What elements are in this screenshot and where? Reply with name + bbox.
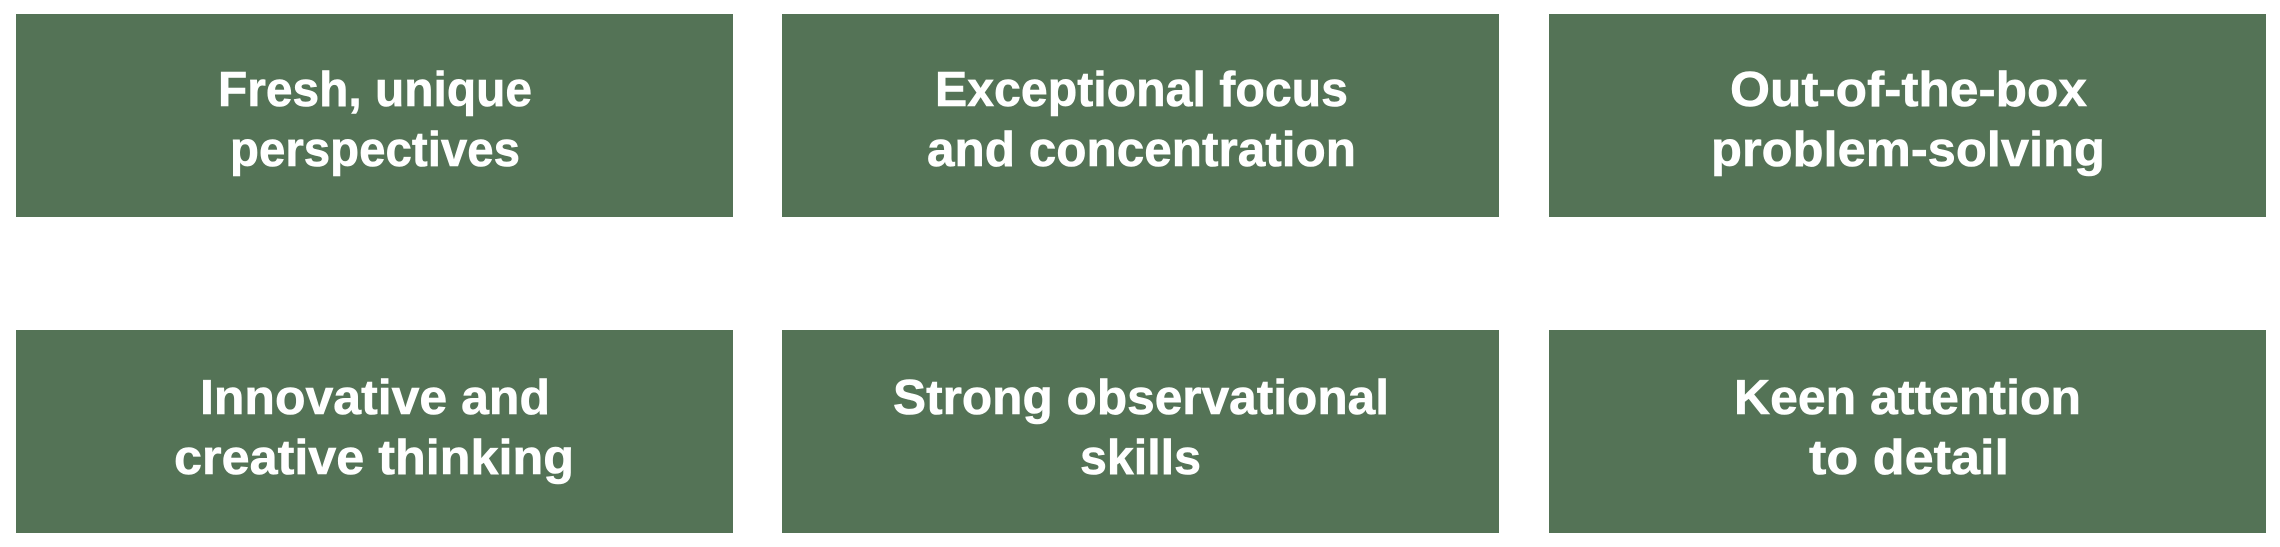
panel: out-of-the-box problem-solving [1549, 14, 2266, 217]
panel: keen attention to detail [1549, 330, 2266, 533]
panel: strong observational skills [782, 330, 1499, 533]
panel: out-of-the-box problem-solving: problem-solving [1711, 123, 2105, 177]
panel: keen attention to detail: Keen attention [1734, 371, 2081, 425]
panel: innovative and creative thinking [16, 330, 733, 533]
panel: fresh, unique perspectives: perspectives [230, 123, 520, 177]
panel: fresh, unique perspectives [16, 14, 733, 217]
panel: strong observational skills: skills [1080, 431, 1201, 485]
panel: strong observational skills: Strong observational [893, 371, 1389, 425]
panel: innovative and creative thinking: Innovative and [200, 371, 550, 425]
panel: fresh, unique perspectives: Fresh, unique [218, 63, 532, 117]
panel: exceptional focus and concentration [782, 14, 1499, 217]
panel: keen attention to detail: to detail [1809, 431, 2009, 485]
panel: exceptional focus and concentration: and concentration [927, 123, 1356, 177]
panel: out-of-the-box problem-solving: Out-of-the-box [1730, 63, 2087, 117]
panel: innovative and creative thinking: creative thinking [174, 431, 574, 485]
panel: exceptional focus and concentration: Exceptional focus [935, 63, 1348, 117]
